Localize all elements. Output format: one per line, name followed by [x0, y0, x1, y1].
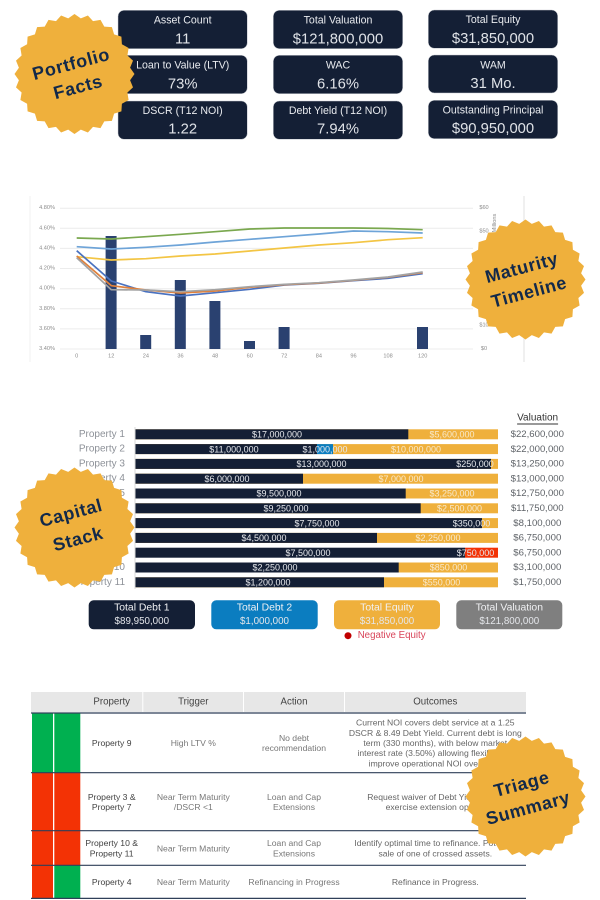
axis: left percent labels: 3.40%: [39, 346, 55, 352]
row: property 10 and 11: Near Term Maturity: [157, 844, 230, 854]
axis: right dollar labels: $40: [479, 252, 489, 258]
row: property 3 and 7: [88, 792, 504, 812]
axis: right dollar labels: [479, 205, 498, 352]
axis: right dollar labels: $20: [479, 299, 489, 305]
badge: capital stack: Capital: [37, 495, 105, 531]
card: WAM: [428, 55, 558, 93]
property labels: Property 2: [79, 444, 125, 455]
row: property 9: term (330 months), with below market: [363, 738, 508, 748]
axis: months labels: 36: [177, 354, 184, 360]
axis: left percent labels: 4.20%: [39, 266, 55, 272]
legend: total debt 1: $89,950,000: [115, 616, 170, 627]
row: property 9: No debt: [279, 733, 310, 743]
row: property 3 and 7: Request waiver of Debt Yield test to: [367, 792, 504, 802]
property labels: Property 9: [79, 547, 125, 558]
axis: months labels: [75, 354, 427, 360]
row: property 4: [92, 877, 479, 887]
badge: triage summary: [466, 736, 586, 856]
legend: total equity: Total Equity: [360, 602, 415, 614]
valuation column: $22,600,000: [511, 429, 564, 440]
row: property 3 and 7: Extensions: [273, 802, 315, 812]
axis: left percent labels: 3.80%: [39, 306, 55, 312]
badge: capital stack: [14, 468, 134, 588]
bar value labels: $3,250,000: [429, 489, 475, 499]
card: WAC: WAC: [326, 59, 351, 71]
card: total equity: Total Equity: [466, 14, 521, 26]
row: property 10 and 11: Loan and Cap: [267, 838, 321, 848]
badge: capital stack: Stack: [51, 523, 106, 555]
property labels: Property 6: [79, 503, 125, 514]
axis: right dollar labels: $50: [479, 229, 489, 235]
row: property 9: recommendation: [262, 743, 326, 753]
axis: months labels: 72: [281, 354, 287, 360]
card: debt yield: [273, 101, 403, 139]
row: property 3 and 7: exercise extension option.: [386, 802, 485, 812]
row: property 3 and 7: Property 7: [92, 802, 132, 812]
card: total valuation: Total Valuation: [304, 15, 372, 27]
badge: maturity timeline: Timeline: [489, 272, 569, 312]
card: outstanding principal: Outstanding Principal: [443, 105, 543, 117]
bar value labels: $2,250,000: [415, 533, 461, 543]
card: debt yield: 7.94%: [317, 122, 359, 138]
table header: Outcomes: [413, 696, 458, 708]
row: property 4: Refinancing in Progress: [248, 877, 340, 887]
card: WAC: 6.16%: [317, 76, 359, 92]
axis: months labels: 60: [247, 354, 253, 360]
status cells: [32, 713, 80, 898]
card: WAM: 31 Mo.: [470, 76, 516, 92]
bar value labels: $10,000,000: [391, 444, 441, 454]
bar value labels: $7,000,000: [378, 474, 424, 484]
row: property 10 and 11: Property 11: [90, 848, 134, 858]
bar value labels: $9,500,000: [256, 489, 302, 499]
card: total valuation: $121,800,000: [293, 31, 383, 47]
row: property 9: DSCR & 8.49 Debt Yield. Current debt is long: [349, 728, 522, 738]
bar value labels: $6,000,000: [204, 474, 250, 484]
bar value labels: [204, 430, 494, 588]
valuation column: $6,750,000: [513, 547, 561, 558]
valuation column: $22,000,000: [511, 444, 564, 455]
badge: portfolio facts: Portfolio: [30, 44, 112, 84]
bar value labels: $11,000,000: [209, 444, 259, 454]
card: asset count: Asset Count: [154, 15, 212, 27]
debt 2 bar: [317, 444, 333, 454]
bar value labels: $250,000: [456, 459, 494, 469]
axis: months labels: 84: [316, 354, 322, 360]
valuation column: $8,100,000: [513, 518, 561, 529]
card: outstanding principal: $90,950,000: [452, 121, 534, 137]
bars: maturing balance: [106, 236, 428, 349]
bar value labels: $7,750,000: [294, 518, 340, 528]
card: DSCR: [118, 101, 247, 139]
lines: yield curves: [77, 228, 423, 296]
bar value labels: $850,000: [430, 563, 467, 573]
bar value labels: $9,250,000: [263, 504, 309, 514]
row: property 10 and 11: sale of one of crossed assets.: [378, 848, 492, 858]
property labels: Property 7: [79, 518, 125, 529]
row: property 3 and 7: Loan and Cap: [267, 792, 321, 802]
valuation column: $1,750,000: [513, 577, 561, 588]
card: loan to value: Loan to Value (LTV): [136, 59, 229, 71]
row: property 9: Property 9: [92, 738, 132, 748]
row: property 9: High LTV %: [171, 738, 216, 748]
card: WAC: [273, 55, 403, 94]
axis: right dollar labels: $0: [481, 346, 487, 352]
property labels: [73, 429, 125, 588]
card: asset count: [118, 10, 247, 49]
bar value labels: $2,500,000: [437, 504, 482, 514]
legend: total equity: [334, 600, 440, 629]
table header: Property: [93, 696, 130, 708]
axis: months labels: 120: [418, 354, 427, 360]
row: property 3 and 7: Property 3 &: [88, 792, 136, 802]
debt 1 bars: [136, 429, 491, 587]
bar value labels: $1,200,000: [245, 578, 291, 588]
legend: total valuation: Total Valuation: [476, 602, 543, 614]
negative equity bar: [465, 548, 498, 558]
legend: total debt 1: [89, 600, 195, 629]
table header: [31, 692, 526, 712]
axis: right dollar labels: $60: [479, 205, 489, 211]
row: property 4: Refinance in Progress.: [392, 877, 479, 887]
bar value labels: $13,000,000: [296, 459, 347, 469]
row: property 4: Property 4: [92, 877, 132, 887]
badge: portfolio facts: [14, 14, 134, 134]
badge: maturity timeline: Maturity: [483, 248, 560, 287]
card: DSCR: 1.22: [168, 122, 197, 138]
axis: months labels: 48: [212, 354, 218, 360]
bar value labels: $2,250,000: [252, 563, 298, 573]
chart: maturity timeline: [30, 196, 524, 362]
valuation column: $11,750,000: [511, 503, 564, 514]
legend: total valuation: [456, 600, 562, 629]
badge: maturity timeline: [466, 220, 586, 340]
row: property 9: [92, 718, 522, 768]
legend: total equity: $31,850,000: [360, 616, 415, 627]
valuation column: $3,100,000: [513, 562, 561, 573]
chart: capital stack: [73, 412, 564, 589]
row: property 10 and 11: [85, 838, 516, 858]
bar value labels: $750,000: [457, 548, 494, 558]
card: total equity: [428, 10, 558, 48]
badge: portfolio facts: Facts: [51, 71, 105, 103]
equity bars: [136, 429, 498, 587]
badge: triage summary: Summary: [484, 787, 572, 829]
legend: total debt 2: [211, 600, 318, 629]
axis: months labels: 0: [75, 354, 78, 360]
legend: total debt 1: Total Debt 1: [114, 602, 170, 614]
row: property 3 and 7: /DSCR <1: [174, 802, 213, 812]
table: triage summary: [31, 692, 526, 898]
row: property 10 and 11: Extensions: [273, 848, 315, 858]
legend: negative equity: Negative Equity: [358, 630, 426, 641]
axis: right dollar labels: $30: [479, 276, 489, 282]
property labels: Property 5: [79, 488, 125, 499]
badge: triage summary: Triage: [492, 767, 552, 801]
axis: right dollar labels: $10: [479, 323, 489, 329]
row: property 9: improve operational NOI over time.: [369, 758, 502, 768]
card: asset count: 11: [175, 31, 190, 47]
row: property 10 and 11: Identify optimal time to refinance. Potential: [354, 838, 516, 848]
bar value labels: $1,000,000: [302, 444, 348, 454]
table header: Trigger: [178, 696, 209, 708]
axis: left percent labels: 4.00%: [39, 286, 55, 292]
bar value labels: $5,600,000: [429, 430, 475, 440]
panel: portfolio facts cards: [118, 10, 558, 139]
bar value labels: $17,000,000: [252, 430, 302, 440]
property labels: Property 10: [73, 562, 125, 573]
axis: left percent labels: [39, 205, 55, 352]
legend: total debt 2: $1,000,000: [240, 616, 290, 627]
axis: months labels: 108: [383, 354, 393, 360]
card: total equity: $31,850,000: [452, 31, 534, 47]
row: property 4: Near Term Maturity: [157, 877, 230, 887]
card: outstanding principal: [428, 100, 558, 139]
property labels: Property 4: [79, 473, 125, 484]
bar value labels: $4,500,000: [241, 533, 287, 543]
axis: left percent labels: 4.60%: [39, 225, 55, 231]
valuation column: $13,250,000: [511, 459, 564, 470]
valuation column: $13,000,000: [511, 473, 564, 484]
row: property 10 and 11: Property 10 &: [85, 838, 138, 848]
axis: months labels: 24: [143, 354, 149, 360]
row: property 9: Current NOI covers debt service at a 1.25: [356, 718, 515, 728]
legend: total debt 2: Total Debt 2: [237, 602, 292, 614]
valuation column: $12,750,000: [511, 488, 564, 499]
bar value labels: $350,000: [453, 518, 490, 528]
table header: Action: [281, 696, 307, 708]
property labels: Property 8: [79, 532, 125, 543]
valuation column: [511, 429, 564, 588]
row: property 9: interest rate (3.50%) allowing flexibility to: [357, 748, 513, 758]
axis: right dollar labels: Millions: [492, 213, 498, 232]
axis: months labels: 12: [108, 354, 114, 360]
bar value labels: $550,000: [423, 578, 460, 588]
legend: total valuation: $121,800,000: [479, 616, 540, 627]
property labels: Property 3: [79, 458, 125, 469]
axis: months labels: 96: [350, 354, 357, 360]
heading: valuation: Valuation: [517, 412, 558, 424]
property labels: Property 1: [79, 429, 125, 440]
card: DSCR: DSCR (T12 NOI): [143, 105, 223, 117]
card: loan to value: 73%: [168, 76, 198, 92]
card: debt yield: Debt Yield (T12 NOI): [289, 105, 387, 117]
axis: left percent labels: 4.80%: [39, 205, 55, 211]
valuation column: $6,750,000: [513, 533, 561, 544]
card: loan to value: [118, 55, 247, 94]
axis: left percent labels: 4.40%: [39, 245, 55, 251]
property labels: Property 11: [74, 577, 125, 588]
row: property 3 and 7: Near Term Maturity: [157, 792, 230, 802]
card: WAM: WAM: [480, 59, 506, 71]
bar value labels: $7,500,000: [285, 548, 331, 558]
axis: left percent labels: 3.60%: [39, 326, 55, 332]
legend: capital stack totals: [89, 600, 562, 641]
card: total valuation: [273, 10, 403, 49]
